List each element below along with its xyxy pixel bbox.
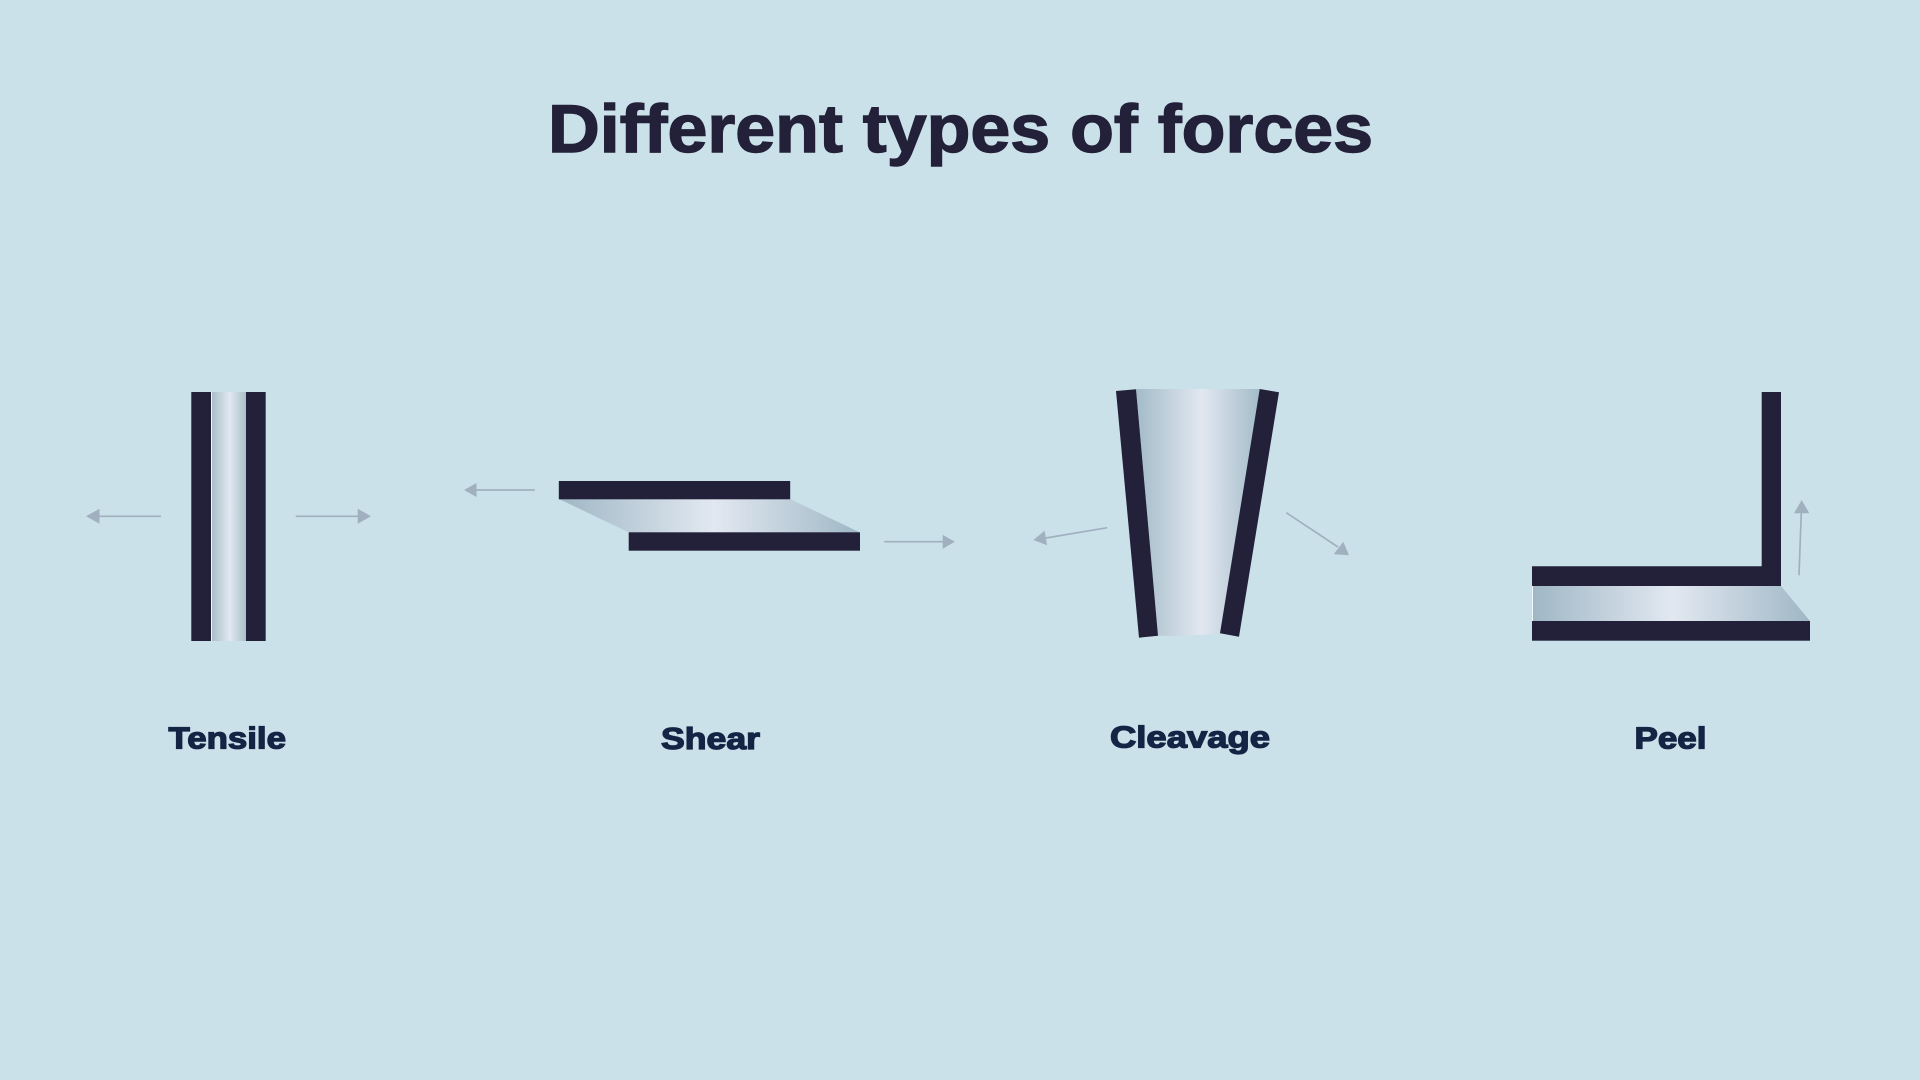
panel: peel — [1532, 392, 1810, 756]
cleavage left adherend — [1116, 389, 1158, 638]
panel: cleavage — [1033, 389, 1349, 754]
cleavage left arrow — [1033, 528, 1107, 545]
panel: shear — [464, 481, 955, 756]
tensile right adherend — [246, 392, 266, 641]
tensile right arrow — [296, 509, 371, 524]
cleavage right adherend — [1220, 389, 1279, 637]
peel arrow — [1794, 500, 1809, 575]
cleavage adhesive layer — [1136, 389, 1260, 636]
tensile white edge — [211, 392, 212, 641]
tensile left arrow — [86, 509, 161, 524]
shear bottom adherend — [629, 532, 860, 551]
panel: tensile — [86, 392, 371, 756]
shear label: Shear — [661, 721, 760, 756]
peel label: Peel — [1634, 720, 1706, 756]
peel lower adherend — [1532, 621, 1810, 641]
shear adhesive layer — [559, 499, 860, 532]
title: Different types of forces — [548, 91, 1373, 167]
tensile left adherend — [191, 392, 211, 641]
shear left arrow — [464, 483, 535, 497]
cleavage right arrow — [1286, 513, 1349, 555]
peel adhesive layer — [1533, 586, 1810, 621]
shear top adherend — [559, 481, 790, 499]
shear right arrow — [884, 535, 955, 549]
peel upper adherend, bent upward — [1532, 392, 1781, 586]
peel white edge — [1532, 586, 1533, 621]
cleavage label: Cleavage — [1110, 720, 1270, 754]
tensile adhesive layer — [212, 392, 246, 641]
tensile label: Tensile — [168, 720, 286, 756]
